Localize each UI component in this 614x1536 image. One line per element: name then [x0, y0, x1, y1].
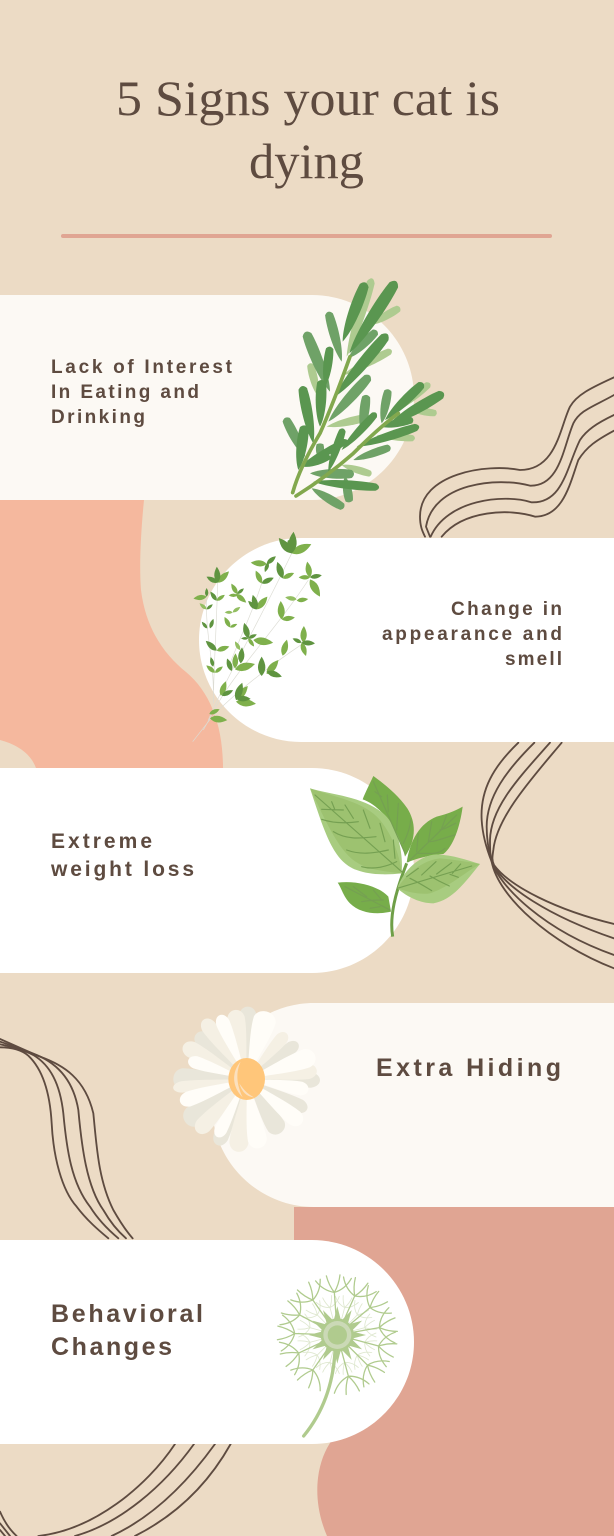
- decorative lines: top right: [420, 377, 614, 537]
- leaf veins: [315, 782, 472, 910]
- text: sign 1: Lack of Interest: [51, 357, 233, 378]
- rosemary mid leaves: [281, 310, 393, 512]
- text: sign 5: Behavioral: [51, 1300, 203, 1328]
- title: dying: [249, 133, 364, 189]
- back petals: [173, 1007, 320, 1148]
- text: sign 1: In Eating and: [51, 382, 199, 403]
- text: sign 5: [51, 1300, 203, 1361]
- text: sign 1: [51, 357, 233, 428]
- text: sign 2: Change in: [451, 599, 562, 620]
- inner seeds: [296, 1294, 379, 1376]
- panel: sign 5: [0, 1240, 414, 1444]
- text: sign 3: [50, 830, 194, 881]
- icon: green leaves: [310, 776, 480, 937]
- text: sign 3: weight loss: [50, 858, 194, 881]
- text: sign 2: [382, 599, 562, 670]
- panel: sign 1: [0, 295, 414, 500]
- rose background blob: [294, 1207, 614, 1536]
- rosemary light leaves: [306, 277, 437, 478]
- thyme leaves, mid green: [193, 540, 323, 723]
- text: sign 4: Extra Hiding: [376, 1054, 561, 1082]
- text: sign 1: Drinking: [51, 407, 145, 428]
- text: sign 5: Changes: [51, 1333, 172, 1361]
- title: 5 Signs your cat is: [116, 70, 500, 126]
- panel: sign 2: [199, 538, 614, 742]
- rosemary dark leaves: [293, 278, 446, 492]
- rosemary stems: [293, 357, 398, 496]
- panel: sign 3: [0, 768, 414, 973]
- text: sign 2: appearance and: [382, 624, 562, 645]
- decorative lines: middle left: [0, 1039, 133, 1238]
- title divider: [61, 234, 552, 238]
- icon: dandelion: [276, 1273, 400, 1436]
- thyme stems: [193, 553, 308, 742]
- text: sign 3: Extreme: [51, 830, 152, 853]
- icon: thyme sprig: [193, 531, 323, 742]
- thyme leaves, light green: [198, 595, 297, 651]
- decorative lines: middle right: [482, 743, 614, 968]
- panel: sign 4: [212, 1003, 614, 1207]
- front petals: [178, 1008, 318, 1150]
- icon: daisy: [173, 1007, 320, 1153]
- flower centre: [228, 1058, 265, 1100]
- dandelion hub: [309, 1306, 366, 1364]
- dandelion stem: [304, 1352, 335, 1436]
- title: [116, 70, 500, 189]
- decorative lines: bottom: [0, 1444, 231, 1536]
- peach background blob: [0, 500, 223, 768]
- background patch, lower left of peach blob: [0, 740, 36, 768]
- outer seeds: [276, 1273, 400, 1397]
- text: sign 2: smell: [505, 649, 562, 670]
- icon: rosemary sprig: [281, 277, 446, 512]
- thyme leaves, dark green: [200, 531, 322, 702]
- middle petals: [173, 1009, 318, 1153]
